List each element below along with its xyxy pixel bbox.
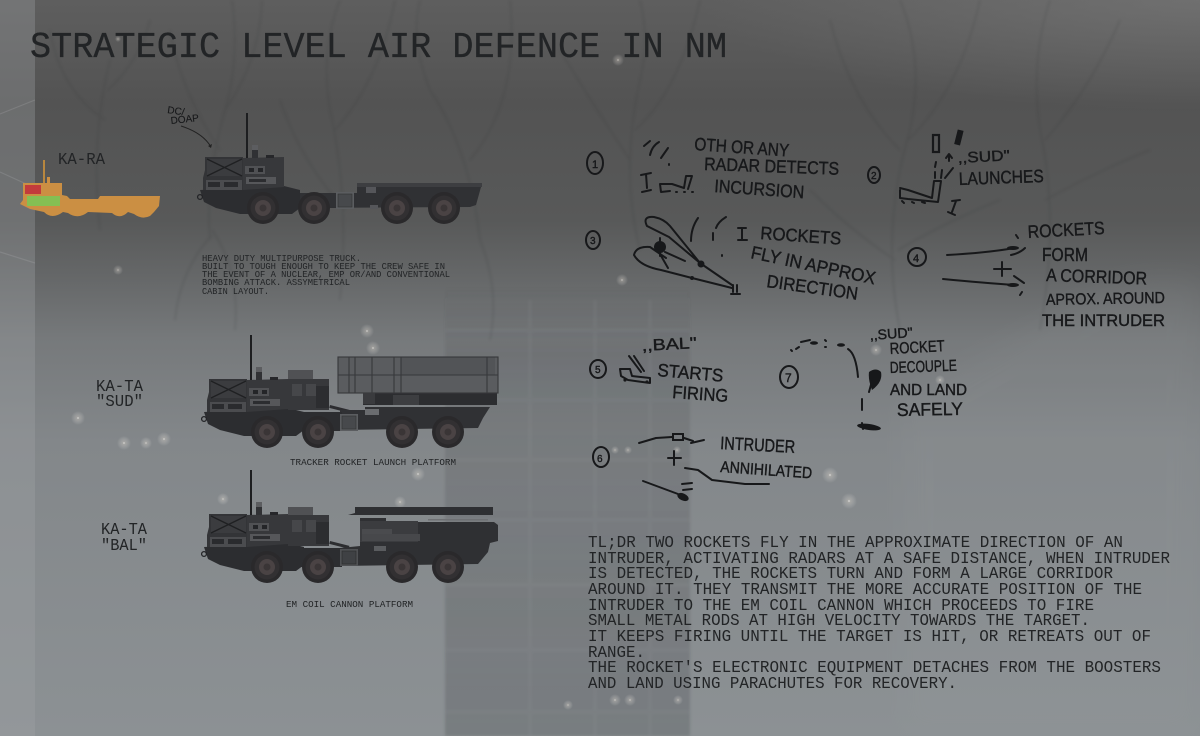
step 2: SUD launches: ,,SUD" (957, 147, 1010, 167)
text block: TL;DR summary: AND LAND USING PARACHUTES FOR RECOVERY. (588, 675, 957, 693)
step 7: SUD rocket decouples and lands safely: 7 (785, 371, 792, 385)
text block: TL;DR summary: INTRUDER TO THE EM COIL CANNON WHICH PROCEEDS TO FIRE (588, 597, 1094, 615)
step 5: BAL starts firing: STARTS (657, 360, 724, 386)
text block: TL;DR summary: INTRUDER, ACTIVATING RADARS AT A SAFE DISTANCE, WHEN INTRUDER (588, 550, 1170, 568)
label: KA-TA SUD (96, 378, 144, 412)
text block: TL;DR summary: RANGE. (588, 644, 645, 662)
step 3: rockets fly in approx direction: 3 (590, 236, 596, 247)
text block: TL;DR summary: SMALL METAL RODS AT HIGH VELOCITY TOWARDS THE TARGET. (588, 612, 1090, 630)
step 6: intruder annihilated (593, 433, 813, 503)
step 2: SUD launches (868, 129, 1044, 215)
caption: tracker rocket launch platform: TRACKER ROCKET LAUNCH PLATFORM (290, 457, 456, 468)
title: STRATEGIC LEVEL AIR DEFENCE IN NM (30, 27, 727, 68)
step 4: rockets form a corridor: THE INTRUDER (1042, 311, 1165, 330)
truck: KA-RA (198, 113, 482, 224)
truck: KA-TA BAL (202, 470, 498, 583)
step 2: SUD launches: 2 (871, 171, 877, 182)
icon: KA-RA orange layout silhouette (20, 160, 160, 218)
label: KA-RA: KA-RA (58, 151, 106, 170)
step 1: radar detects incursion: RADAR DETECTS (704, 154, 839, 179)
bare trees (50, 0, 1150, 340)
label: KA-TA BAL: KA-TA (101, 521, 148, 540)
step 7: SUD rocket decouples and lands safely: SAFELY (897, 399, 963, 420)
step 4: rockets form a corridor: 4 (913, 253, 919, 265)
label: KA-TA SUD: KA-TA (96, 378, 144, 397)
step 3: rockets fly in approx direction: ROCKETS (760, 223, 842, 249)
text block: TL;DR summary (588, 534, 1170, 693)
truck: KA-TA SUD (202, 335, 498, 448)
step 5: BAL starts firing: ,,BAL" (641, 335, 697, 355)
step 4: rockets form a corridor: ROCKETS (1027, 218, 1105, 242)
step 5: BAL starts firing (590, 335, 729, 406)
step 6: intruder annihilated: ANNIHILATED (720, 459, 813, 482)
label: KA-TA BAL (101, 521, 148, 556)
step 3: rockets fly in approx direction: FLY IN APPROX (749, 242, 878, 288)
step 4: rockets form a corridor: FORM (1042, 245, 1088, 265)
step 6: intruder annihilated: 6 (597, 454, 603, 465)
label: KA-TA BAL: "BAL" (101, 537, 147, 556)
step 3: rockets fly in approx direction: DIRECTION (765, 271, 859, 304)
text block: TL;DR summary: IS DETECTED, THE ROCKETS TURN AND FORM A LARGE CORRIDOR (588, 565, 1113, 583)
text block: TL;DR summary: IT KEEPS FIRING UNTIL THE TARGET IS HIT, OR RETREATS OUT OF (588, 628, 1151, 646)
tower block (445, 285, 690, 736)
caption: EM coil cannon platform: EM COIL CANNON PLATFORM (286, 599, 413, 610)
step 5: BAL starts firing: 5 (595, 365, 601, 376)
handwritten note: DC door: DOAP (170, 113, 200, 127)
step 2: SUD launches: LAUNCHES (958, 166, 1044, 189)
step 6: intruder annihilated: INTRUDER (720, 433, 796, 457)
text block: KA-RA description: HEAVY DUTY MULTIPURPOSE TRUCK. (202, 254, 361, 264)
step 7: SUD rocket decouples and lands safely: ,,SUD" (869, 324, 913, 343)
step 4: rockets form a corridor: A CORRIDOR (1046, 265, 1147, 289)
step 5: BAL starts firing: FIRING (672, 382, 729, 406)
text block: KA-RA description: BUILT TO TOUGH ENOUGH TO KEEP THE CREW SAFE IN (202, 262, 445, 272)
step 3: rockets fly in approx direction (586, 217, 878, 304)
step 7: SUD rocket decouples and lands safely: DECOUPLE (890, 358, 957, 377)
text block: KA-RA description (202, 254, 450, 297)
step 1: radar detects incursion: OTH OR ANY (694, 134, 790, 161)
step 1: radar detects incursion: INCURSION (714, 176, 805, 202)
step 4: rockets form a corridor: APROX. AROUND (1046, 290, 1165, 309)
step 4: rockets form a corridor (908, 218, 1165, 330)
text block: TL;DR summary: AROUND IT. THEY TRANSMIT THE MORE ACCURATE POSITION OF THE (588, 581, 1142, 599)
step 1: radar detects incursion: 1 (592, 159, 598, 171)
step 1: radar detects incursion (587, 134, 839, 202)
handwritten note: DC door (167, 105, 212, 148)
handwritten note: DC door: DC/ (167, 105, 185, 118)
text block: KA-RA description: CABIN LAYOUT. (202, 287, 269, 297)
text block: TL;DR summary: THE ROCKET'S ELECTRONIC EQUIPMENT DETACHES FROM THE BOOSTERS (588, 659, 1161, 677)
city lights (71, 36, 945, 710)
text block: KA-RA description: BOMBING ATTACK. ASSYMETRICAL (202, 278, 350, 288)
label: KA-TA SUD: "SUD" (96, 393, 143, 412)
text block: TL;DR summary: TL;DR TWO ROCKETS FLY IN THE APPROXIMATE DIRECTION OF AN (588, 534, 1123, 552)
step 7: SUD rocket decouples and lands safely: AND LAND (890, 382, 967, 399)
step 7: SUD rocket decouples and lands safely: ROCKET (889, 338, 945, 358)
text block: KA-RA description: THE EVENT OF A NUCLEAR, EMP OR/AND CONVENTIONAL (202, 270, 450, 280)
step 7: SUD rocket decouples and lands safely (780, 324, 967, 432)
